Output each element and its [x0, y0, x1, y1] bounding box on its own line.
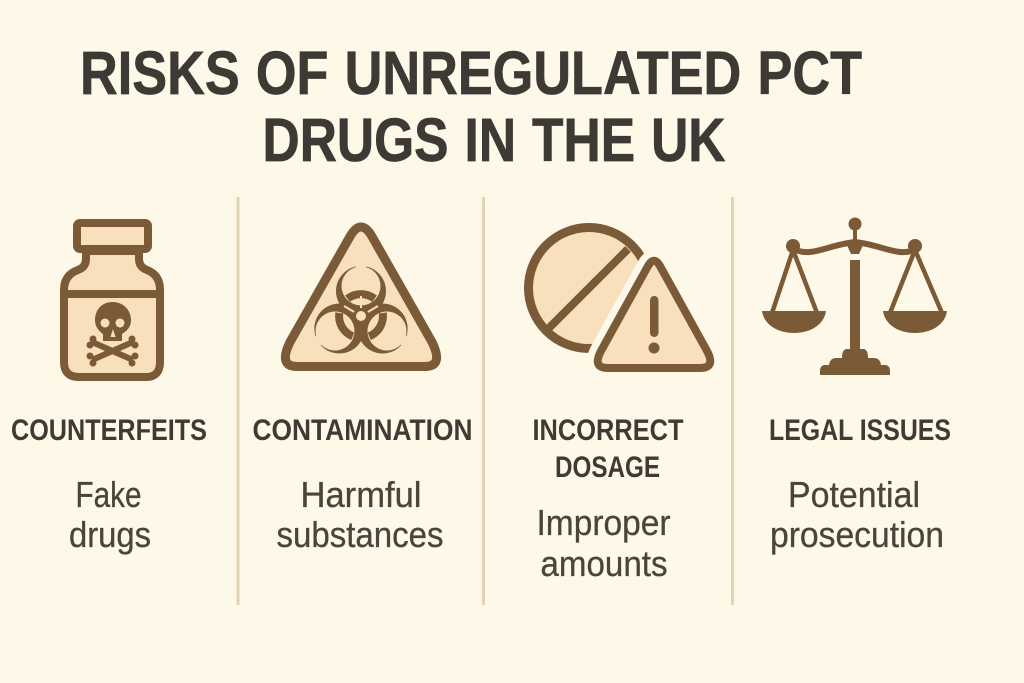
panel: incorrect dosage	[528, 228, 730, 584]
icon: skull and crossbones	[86, 302, 138, 366]
description: improper amounts: Improper	[536, 502, 671, 543]
title	[80, 39, 862, 174]
biohazard symbol	[302, 262, 420, 365]
description: potential prosecution: Potential	[788, 474, 920, 515]
icon: biohazard triangle	[285, 227, 437, 366]
description: potential prosecution	[770, 474, 944, 555]
panel: legal issues	[762, 218, 951, 555]
description: improper amounts	[536, 502, 671, 584]
panel: contamination	[252, 227, 472, 555]
description: fake drugs: drugs	[69, 514, 151, 555]
icon: split pill with warning triangle	[528, 228, 730, 388]
title: DRUGS IN THE UK	[262, 106, 726, 174]
heading: incorrect dosage: INCORRECT	[532, 414, 684, 447]
description: harmful substances: Harmful	[300, 474, 422, 515]
description: harmful substances: substances	[276, 514, 444, 555]
icon: scales of justice	[762, 218, 947, 375]
description: fake drugs: Fake	[76, 474, 142, 515]
icon: poison bottle	[64, 223, 160, 377]
description: improper amounts: amounts	[540, 543, 668, 584]
heading: contamination: CONTAMINATION	[252, 414, 472, 447]
heading: incorrect dosage	[532, 414, 684, 484]
heading: incorrect dosage: DOSAGE	[555, 451, 660, 484]
panel: counterfeits	[11, 223, 207, 555]
heading: counterfeits: COUNTERFEITS	[11, 414, 207, 447]
description: potential prosecution: prosecution	[770, 514, 944, 555]
title: RISKS OF UNREGULATED PCT	[80, 39, 862, 107]
heading: legal issues: LEGAL ISSUES	[769, 414, 951, 447]
description: harmful substances	[276, 474, 444, 555]
description: fake drugs	[69, 474, 151, 555]
